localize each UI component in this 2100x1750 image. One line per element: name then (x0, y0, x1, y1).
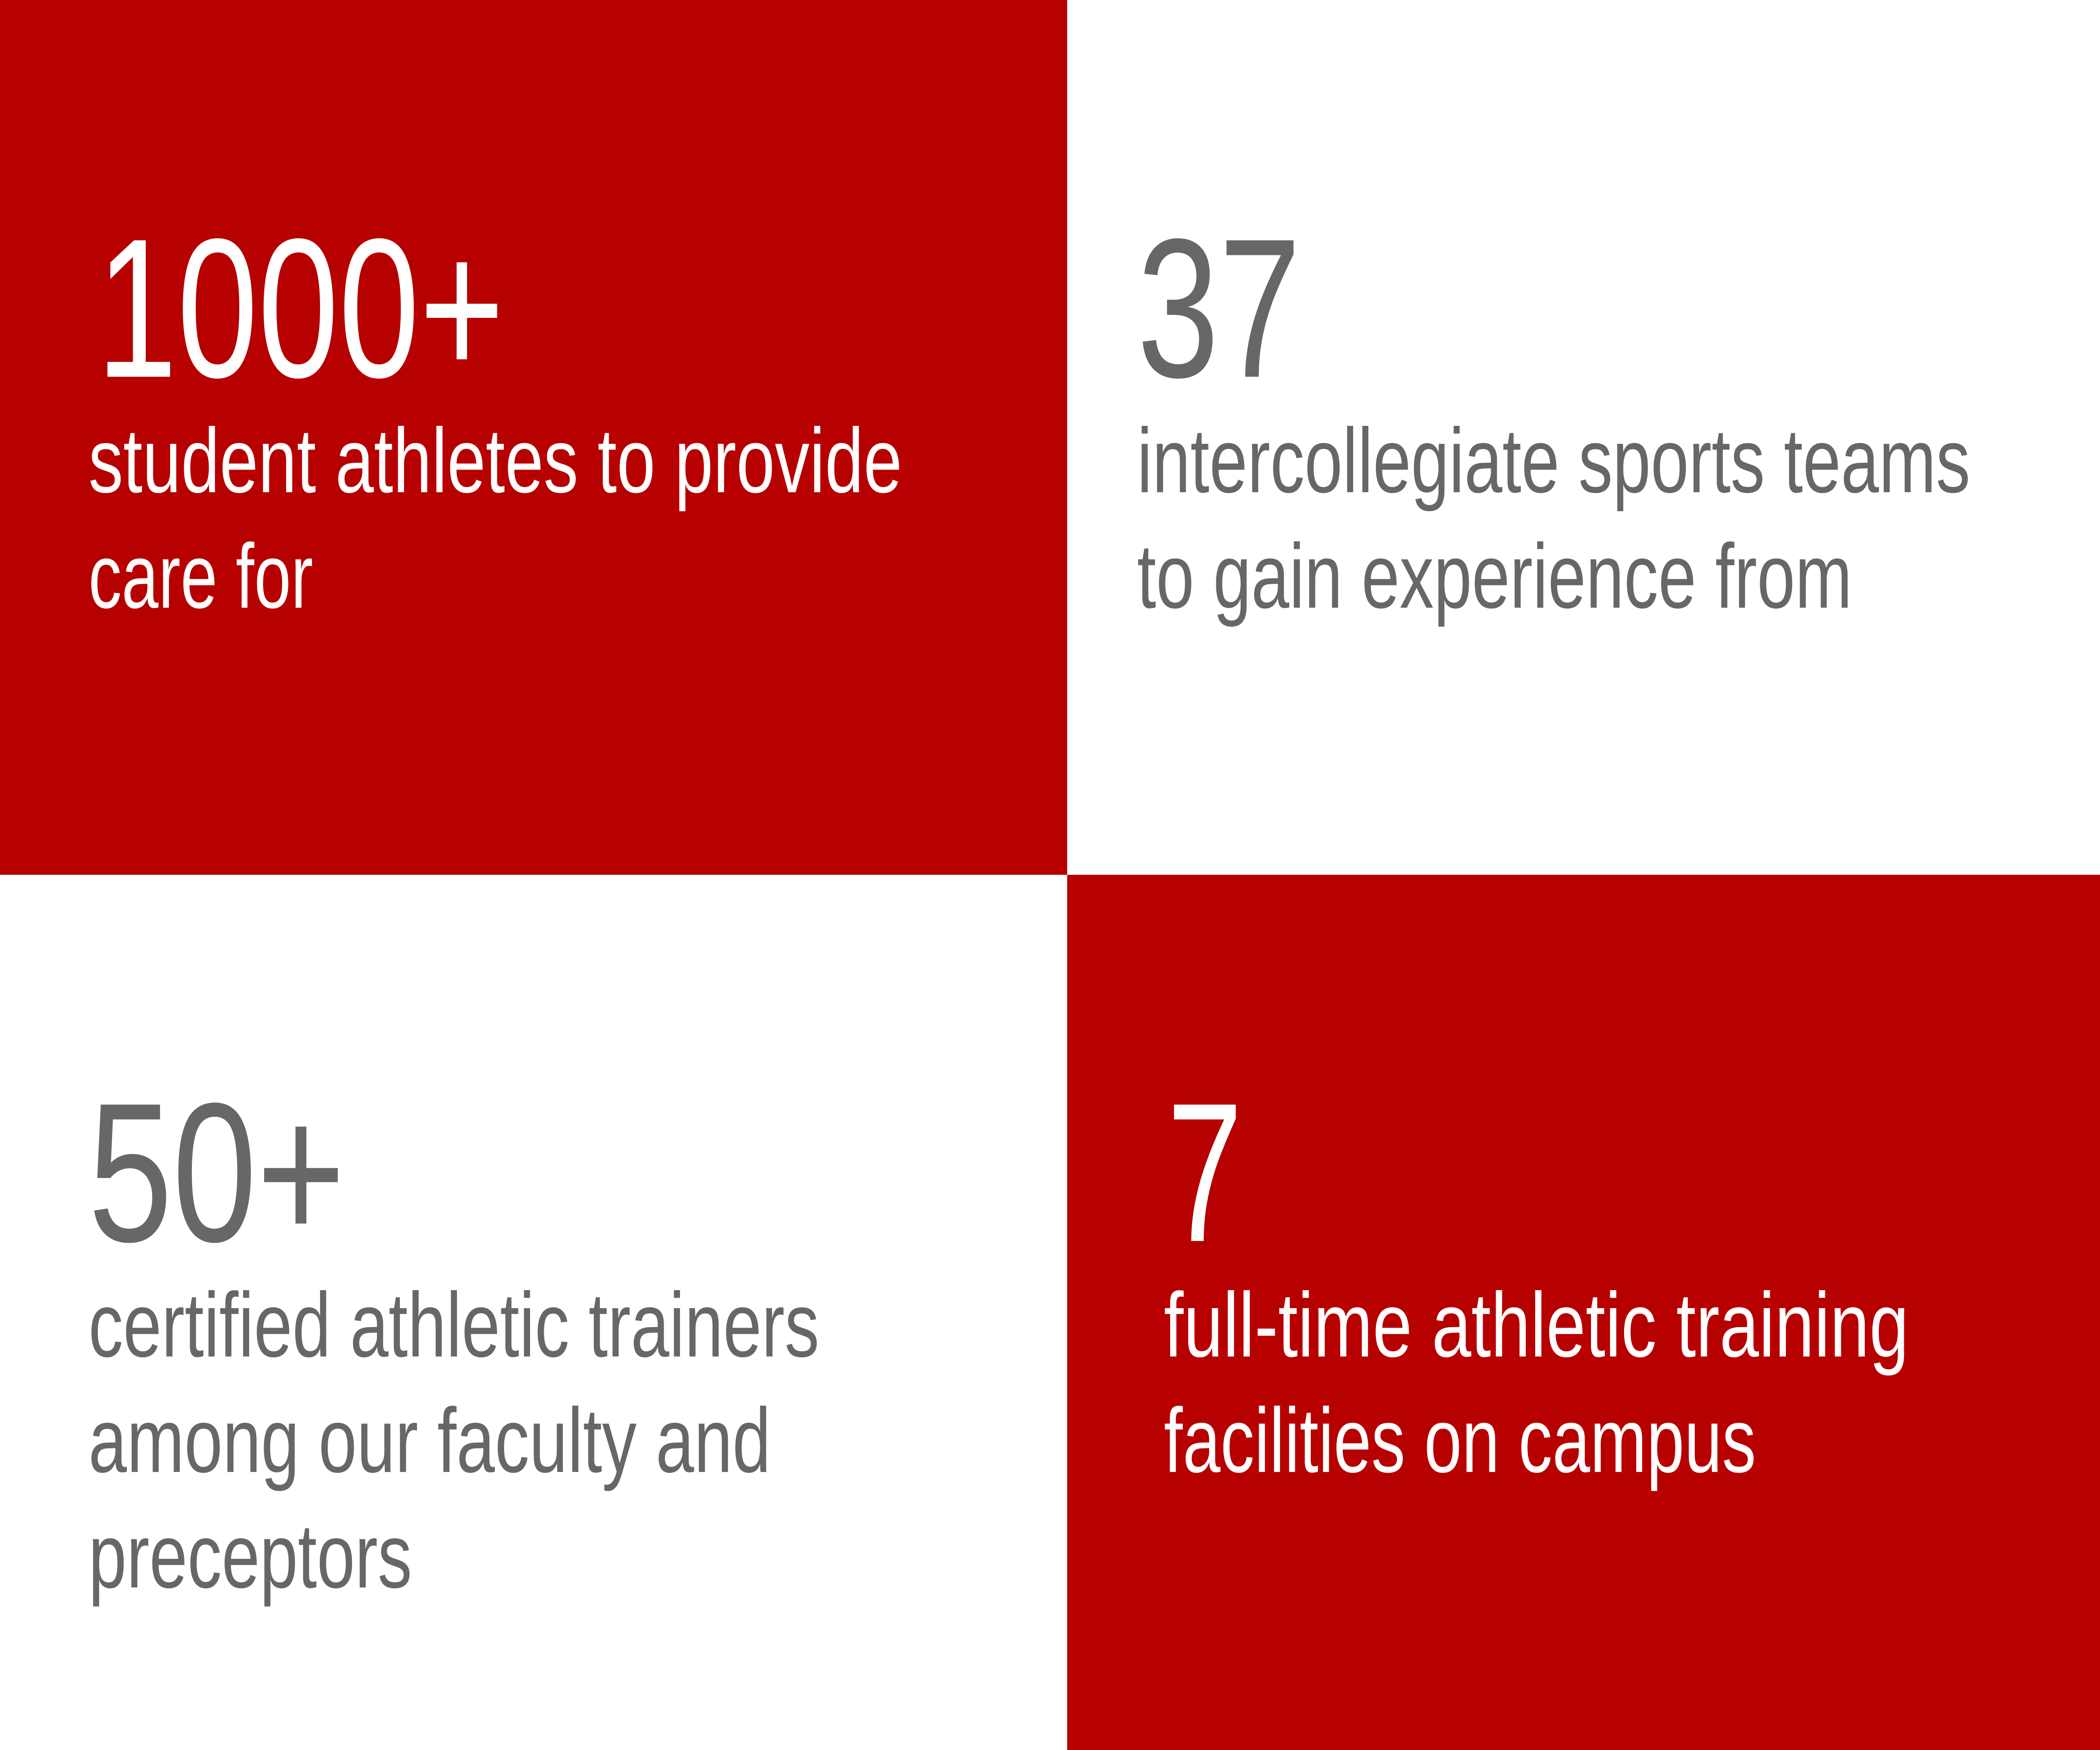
stat number: 37: 37 (1137, 197, 1301, 419)
panel: athletic training facilities (1067, 875, 2100, 1750)
stat description: student athletes (89, 409, 902, 627)
stat description: student athletes: care for (89, 525, 313, 627)
stat description: facilities: full-time athletic training (1164, 1274, 1909, 1376)
panel: certified athletic trainers (88, 1062, 819, 1607)
stat number: 50+: 50+ (88, 1062, 345, 1283)
stat description: certified trainers: certified athletic trainers (89, 1274, 819, 1376)
stat description: sports teams (1137, 409, 1970, 627)
stat description: facilities (1164, 1274, 1909, 1491)
stat description: certified trainers: among our faculty and (89, 1389, 771, 1491)
stat description: sports teams: intercollegiate sports teams (1137, 409, 1970, 512)
stat description: facilities: facilities on campus (1164, 1389, 1756, 1491)
stat description: certified trainers: preceptors (89, 1505, 412, 1607)
panel background: red top left (0, 0, 1067, 875)
stat description: sports teams: to gain experience from (1137, 525, 1852, 627)
panel: intercollegiate sports teams (1137, 197, 1970, 627)
stat description: certified trainers (89, 1274, 819, 1607)
panel background: red bottom right (1067, 875, 2100, 1750)
stat number: 1000+: 1000+ (96, 197, 504, 419)
stat number: 7: 7 (1167, 1062, 1243, 1283)
stat description: student athletes: student athletes to provide (89, 409, 902, 512)
panel: student athletes (0, 0, 1067, 875)
